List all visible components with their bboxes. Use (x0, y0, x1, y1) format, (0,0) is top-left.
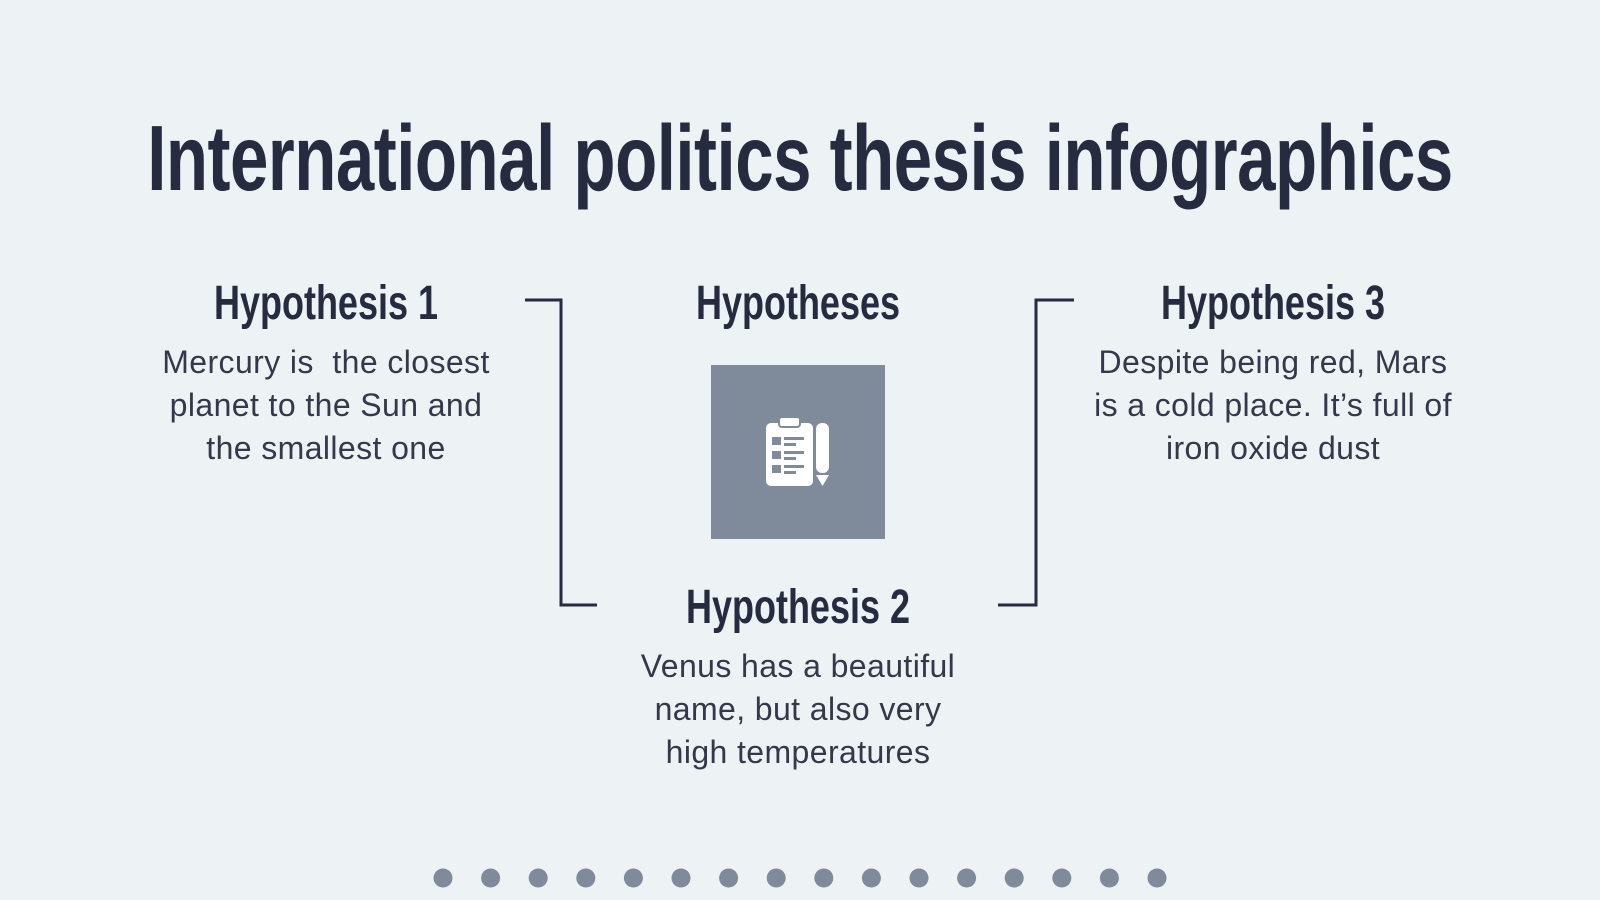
heading: hypothesis 2: Hypothesis 2 (686, 579, 910, 634)
text: hypothesis 2: high temperatures (666, 734, 930, 770)
title: International politics thesis infographics (147, 106, 1453, 210)
heading: hypothesis 1: Hypothesis 1 (214, 275, 438, 330)
icon: clipboard checklist (711, 365, 885, 539)
bracket: right (998, 300, 1074, 605)
bracket: left (525, 300, 597, 605)
text: hypothesis 3 (1094, 344, 1452, 466)
heading: hypotheses: Hypotheses (696, 275, 900, 330)
text: hypothesis 1 (162, 344, 490, 466)
text: hypothesis 3: is a cold place. It’s full of (1094, 387, 1452, 423)
heading: hypothesis 3: Hypothesis 3 (1161, 275, 1385, 330)
text: hypothesis 3: iron oxide dust (1166, 430, 1380, 466)
text: hypothesis 1: the smallest one (206, 430, 446, 466)
text: hypothesis 1: planet to the Sun and (170, 387, 482, 423)
pagination dots (434, 868, 1166, 888)
text: hypothesis 2: Venus has a beautiful (641, 648, 955, 684)
text: hypothesis 2 (640, 648, 955, 770)
text: hypothesis 2: name, but also very (655, 691, 941, 727)
text: hypothesis 1: Mercury is the closest (162, 344, 490, 380)
text: hypothesis 3: Despite being red, Mars (1099, 344, 1447, 380)
